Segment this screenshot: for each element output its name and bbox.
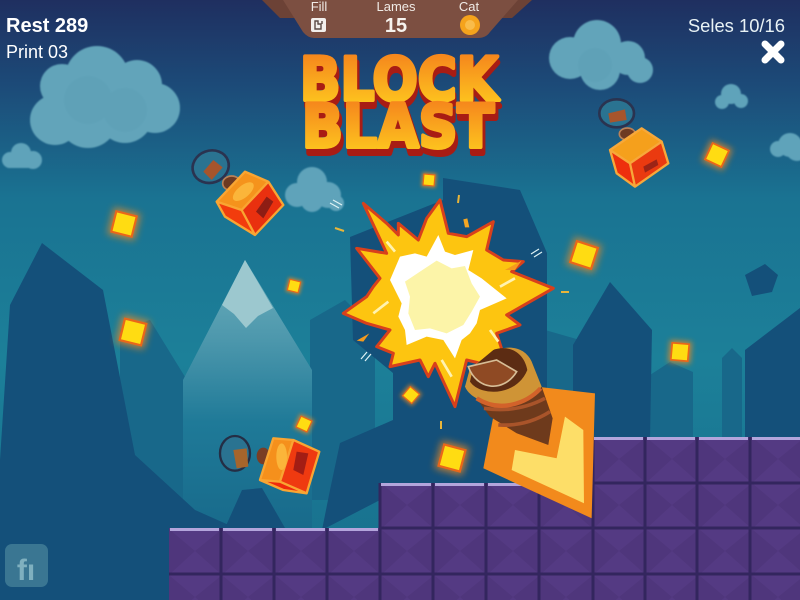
title: block blast	[300, 45, 500, 168]
cloud: right edge	[770, 133, 800, 161]
bomb cube: left	[188, 145, 283, 235]
bomb cube: top right	[599, 99, 668, 187]
icon: gold coin	[460, 15, 480, 35]
cloud: small upper right	[715, 84, 748, 109]
background: snowy mountain	[183, 260, 312, 530]
cannon	[465, 348, 595, 518]
glowing debris squares	[107, 139, 733, 476]
explosion sparks	[330, 195, 569, 429]
title: block blast: BLAST	[304, 98, 496, 168]
text: seles progress: Seles 10/16	[688, 15, 785, 36]
cannon barrel	[465, 348, 553, 445]
title: block blast: BLOCK	[302, 51, 500, 121]
icon: fill badge	[311, 18, 326, 32]
cloud: small far left	[2, 143, 42, 169]
text: rest score: Rest 289	[6, 15, 88, 37]
bomb cube: lower left	[220, 436, 319, 493]
title: block blast: BLAST	[302, 92, 494, 162]
explosion	[343, 200, 553, 407]
top score panel	[262, 0, 532, 38]
background: dark city silhouettes	[0, 178, 800, 600]
text: print level: Print 03	[6, 42, 68, 62]
cloud: large left	[30, 46, 180, 148]
cloud: top right	[549, 20, 653, 90]
cannon base	[483, 387, 595, 518]
purple block staircase	[169, 437, 800, 600]
background: light city silhouettes	[120, 300, 742, 530]
icon: faded f1 badge: fı	[17, 554, 35, 587]
cloud: center	[285, 167, 344, 212]
title: block blast: BLOCK	[300, 45, 500, 115]
icon: close button	[765, 44, 781, 60]
icon: faded f1 badge	[5, 544, 48, 587]
cannon chevron	[512, 417, 584, 503]
value: lames 15: 15	[385, 15, 407, 37]
